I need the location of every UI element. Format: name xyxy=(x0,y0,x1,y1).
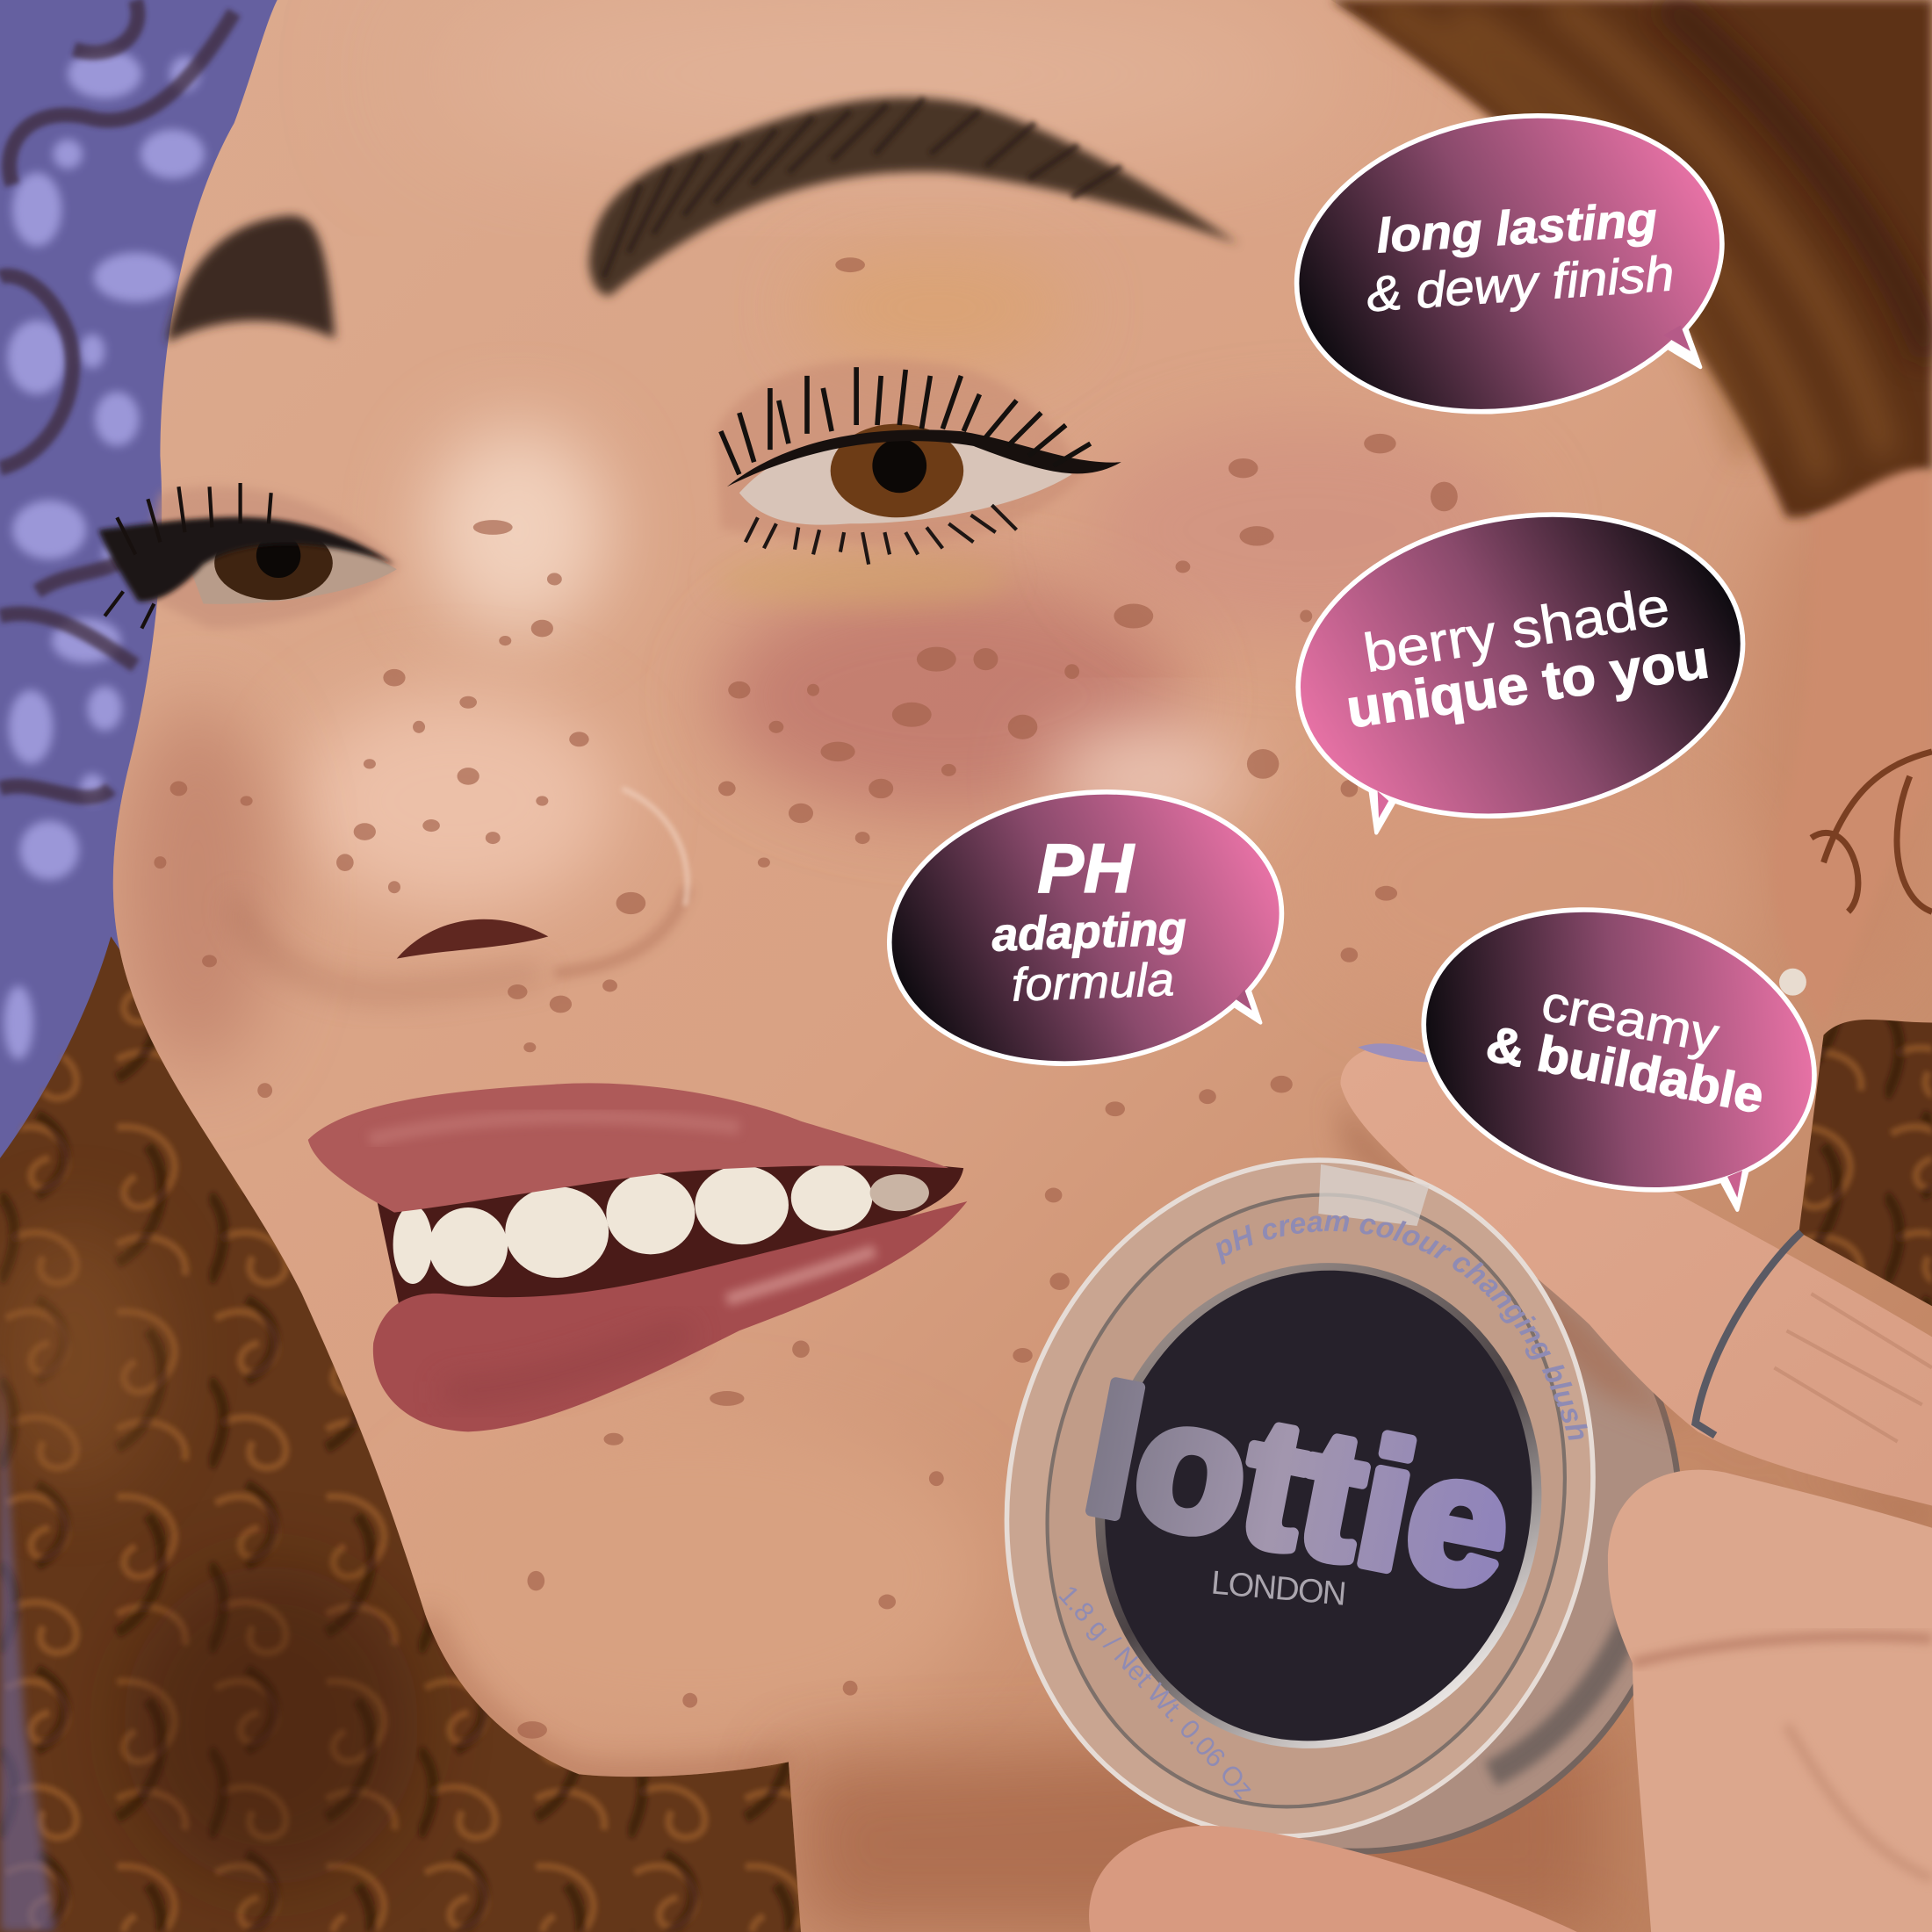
bubble text PH: PH xyxy=(1037,830,1135,907)
hair: upper right xyxy=(1330,0,1932,517)
speech bubble: berry shade xyxy=(1274,481,1767,850)
compact rim text: pH cream colour changing blush xyxy=(1215,1215,1588,1440)
hair: curls lower right xyxy=(1762,985,1932,1343)
ring xyxy=(1696,1232,1801,1436)
thumb xyxy=(1089,1826,1577,1932)
right eyebrow xyxy=(589,97,1238,296)
blush pan xyxy=(1056,1225,1582,1786)
teeth xyxy=(393,1164,929,1287)
bubble text line 1: long lasting xyxy=(1375,191,1659,263)
bubble text line 1: berry shade xyxy=(1359,576,1674,684)
speech bubble: creamy and buildable xyxy=(1394,870,1844,1229)
speech bubble: long lasting xyxy=(1273,83,1746,444)
bubble text line 1: creamy xyxy=(1537,975,1724,1064)
bubble text line 2: unique to you xyxy=(1343,629,1712,739)
middle finger xyxy=(1608,1470,1932,1932)
compact case base xyxy=(982,1133,1741,1911)
background: lavender backdrop xyxy=(0,0,370,1932)
compact lid xyxy=(945,1105,1655,1892)
ear xyxy=(1771,469,1932,1029)
logo: lottie: lottie xyxy=(1071,1350,1527,1627)
logo: LONDON: LONDON xyxy=(1209,1565,1348,1613)
hair: curls lower left xyxy=(0,936,813,1932)
bubble text line 2: & dewy finish xyxy=(1365,245,1676,322)
compact rim text: 1.8 g / Net Wt. 0.06 Oz xyxy=(1053,1579,1260,1805)
speech bubble: PH adapting formula xyxy=(872,768,1300,1088)
bubble text adapting: adapting xyxy=(991,903,1187,962)
freckles xyxy=(154,257,1458,1739)
left eye xyxy=(98,483,400,629)
nose xyxy=(236,789,688,992)
right eye xyxy=(715,359,1121,565)
bubble text formula: formula xyxy=(1011,954,1175,1012)
mouth interior xyxy=(376,1162,963,1313)
lower lip xyxy=(373,1201,967,1431)
compact rim text xyxy=(1053,1215,1588,1805)
left eyebrow xyxy=(166,216,335,342)
upper lip xyxy=(308,1083,948,1213)
bubble text line 2: & buildable xyxy=(1481,1016,1769,1124)
index finger xyxy=(1341,1043,1932,1528)
